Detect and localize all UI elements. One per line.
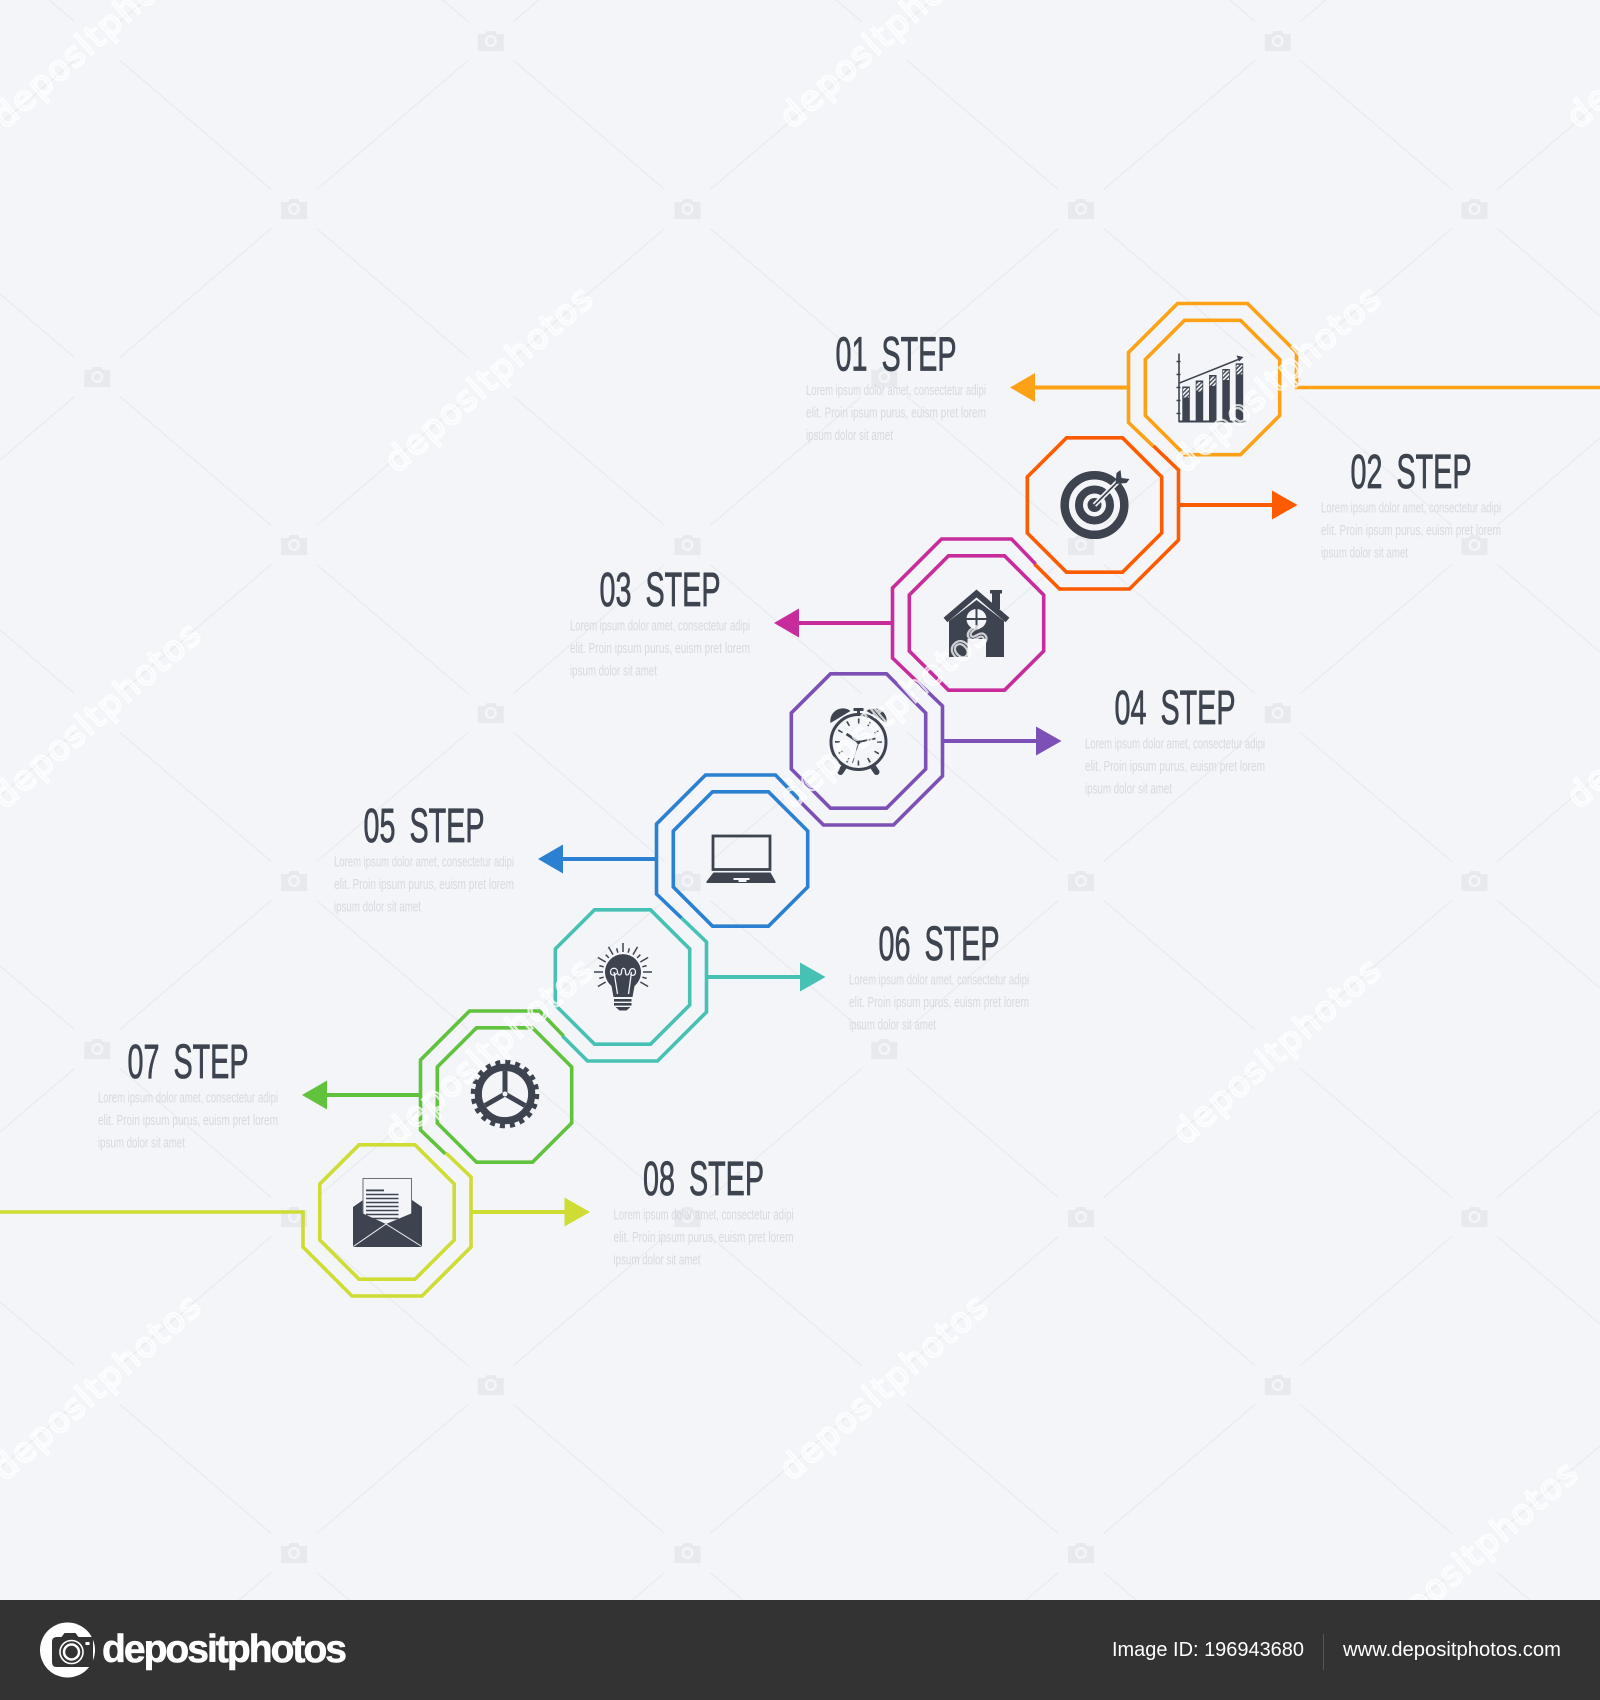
heading: 07 STEP: 07 STEP — [128, 1036, 248, 1089]
panel: step 8 — [0, 1145, 794, 1296]
text block: step 1: elit. Proin ipsum purus, euism pret lorem — [806, 404, 986, 422]
octagon frame: step 1 — [1128, 304, 1600, 455]
text block: step 8: Lorem ipsum dolor amet, consectetur adipi — [614, 1206, 794, 1224]
text block: step 2: elit. Proin ipsum purus, euism pret lorem — [1321, 522, 1501, 539]
footer bar — [0, 1600, 1600, 1700]
text block: step 6: ipsum dolor sit amet — [849, 1016, 937, 1034]
icon: target with arrow — [1065, 470, 1130, 535]
text block: step 5: ipsum dolor sit amet — [334, 898, 422, 916]
image id: Image ID: 196943680 — [1112, 1639, 1304, 1661]
icon: alarm clock — [830, 708, 887, 772]
panel: step 2 — [1027, 438, 1501, 589]
text block: step 6 — [849, 972, 1029, 1034]
icon: open envelope with letter — [353, 1178, 422, 1247]
text block: step 1: Lorem ipsum dolor amet, consectetur adipi — [806, 382, 986, 399]
text block: step 8: elit. Proin ipsum purus, euism pret lorem — [614, 1229, 794, 1246]
text block: step 6: elit. Proin ipsum purus, euism pret lorem — [849, 994, 1029, 1011]
arrow: step 8 — [471, 1198, 590, 1226]
arrow: step 6 — [706, 962, 826, 992]
icon: gear with three spokes — [474, 1063, 536, 1125]
icon: laptop — [706, 836, 776, 883]
arrow: step 2 — [1178, 490, 1298, 520]
heading: 05 STEP: 05 STEP — [364, 800, 484, 853]
text block: step 3 — [570, 618, 750, 680]
text block: step 3: Lorem ipsum dolor amet, consectetur adipi — [570, 618, 750, 634]
text block: step 2 — [1321, 500, 1501, 562]
diagonal watermark words: depositphotos — [377, 951, 601, 1153]
panel: step 4 — [791, 674, 1265, 825]
text block: step 7: ipsum dolor sit amet — [98, 1134, 186, 1152]
text block: step 4: elit. Proin ipsum purus, euism pret lorem — [1085, 758, 1265, 775]
diagonal watermark words: depositphotos — [1165, 951, 1389, 1153]
text block: step 5 — [334, 854, 514, 916]
text block: step 4 — [1085, 736, 1265, 798]
octagon frame: step 2 — [1027, 438, 1178, 589]
heading: 03 STEP: 03 STEP — [600, 564, 720, 617]
text block: step 7: Lorem ipsum dolor amet, consectetur adipi — [98, 1090, 278, 1106]
panel: step 1 — [806, 304, 1600, 455]
arrow: step 4 — [942, 726, 1062, 756]
heading: 01 STEP: 01 STEP — [836, 328, 956, 382]
icon: house — [946, 590, 1008, 657]
heading: 06 STEP: 06 STEP — [878, 918, 1000, 971]
logo wordmark: depositphotos — [102, 1628, 347, 1671]
octagon frame: step 4 — [791, 674, 942, 825]
heading: 02 STEP: 02 STEP — [1350, 446, 1472, 499]
octagon frame: step 5 — [656, 775, 808, 926]
panel: step 7 — [98, 1011, 572, 1162]
text block: step 2: Lorem ipsum dolor amet, consectetur adipi — [1321, 500, 1501, 516]
octagon frame: step 6 — [555, 910, 706, 1061]
icon: footer camera logo — [40, 1622, 95, 1678]
text block: step 7: elit. Proin ipsum purus, euism pret lorem — [98, 1112, 278, 1129]
panel: step 3 — [570, 539, 1044, 690]
diagonal watermark words: depositphotos — [1165, 279, 1389, 481]
text block: step 6: Lorem ipsum dolor amet, consectetur adipi — [849, 972, 1029, 988]
text block: step 4: ipsum dolor sit amet — [1085, 780, 1173, 798]
text block: step 4: Lorem ipsum dolor amet, consectetur adipi — [1085, 736, 1265, 752]
arrow: step 7 — [302, 1080, 420, 1110]
text block: step 1 — [806, 382, 986, 444]
website url: www.depositphotos.com — [1342, 1639, 1561, 1661]
octagon frame: step 3 — [892, 539, 1044, 690]
panel: step 5 — [334, 775, 808, 926]
arrow: step 3 — [774, 608, 892, 638]
octagon frame: step 8 — [0, 1145, 471, 1296]
arrow: step 1 — [1010, 373, 1128, 402]
arrow: step 5 — [538, 844, 656, 874]
octagon frame: step 7 — [420, 1011, 572, 1162]
text block: step 5: Lorem ipsum dolor amet, consectetur adipi — [334, 854, 514, 870]
panel: step 6 — [555, 910, 1029, 1061]
icon: rising bar chart — [1176, 354, 1246, 422]
text block: step 7 — [98, 1090, 278, 1152]
diagonal watermark words: depositphotos — [772, 615, 996, 817]
icon: light bulb with rays — [594, 943, 652, 1010]
text block: step 2: ipsum dolor sit amet — [1321, 544, 1409, 562]
diagonal watermark words: depositphotos — [772, 1287, 996, 1489]
heading: 08 STEP: 08 STEP — [643, 1153, 764, 1206]
text block: step 8: ipsum dolor sit amet — [614, 1252, 701, 1268]
text block: step 1: ipsum dolor sit amet — [806, 427, 894, 444]
text block: step 5: elit. Proin ipsum purus, euism pret lorem — [334, 876, 514, 893]
text block: step 8 — [614, 1206, 794, 1268]
text block: step 3: elit. Proin ipsum purus, euism pret lorem — [570, 640, 750, 657]
text block: step 3: ipsum dolor sit amet — [570, 662, 658, 680]
diagonal watermark words: depositphotos — [1362, 1454, 1586, 1656]
heading: 04 STEP: 04 STEP — [1114, 682, 1236, 735]
diagonal watermark words: depositphotos — [377, 279, 601, 481]
